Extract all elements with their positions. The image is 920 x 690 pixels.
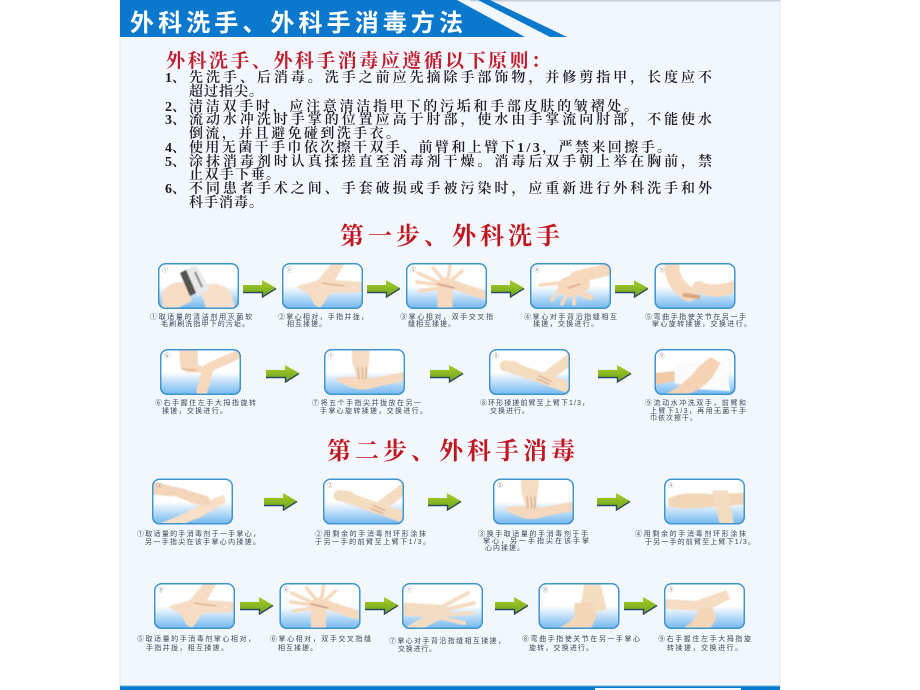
caption <box>480 398 589 415</box>
panel: principles text block: 超过指尖。 <box>189 83 263 100</box>
caption: ⑧环形揉搓前臂至上臂下1/3， <box>480 398 589 407</box>
photo: rubbing forearm: ⑧ <box>493 352 499 360</box>
caption <box>137 634 255 652</box>
caption: ⑤取适量的手消毒剂掌心相对， <box>137 634 255 643</box>
panel: principles text block: 3、 <box>165 113 186 128</box>
step 1-1 <box>150 263 252 328</box>
arrow <box>240 597 273 614</box>
caption: ⑦掌心对手背沿指缝相互揉搓， <box>389 636 505 645</box>
step 1-5 <box>645 263 746 328</box>
caption: 交换进行。 <box>490 406 529 415</box>
arrow <box>598 365 631 382</box>
arrow <box>266 365 299 382</box>
panel: principles text block: 不同患者手术之间、手套破损或手被污染时，应重新进行外科洗手和外 <box>189 180 713 197</box>
caption: ③换手取适量的手消毒剂于手 <box>478 529 588 538</box>
arrow <box>428 493 461 510</box>
caption: 毛刷刷洗指甲下的污垢。 <box>161 319 249 328</box>
caption <box>278 312 368 328</box>
photo: fingers over back of hand: ⑦ <box>406 586 412 594</box>
caption: ⑥右手握住左手大拇指旋转 <box>155 398 256 407</box>
panel: principles text block: 6、 <box>165 182 186 197</box>
caption <box>478 529 589 552</box>
caption: ①取适量的手消毒剂于一手掌心， <box>137 529 260 538</box>
step 1-3 <box>400 263 493 328</box>
panel: principles text block: 科手消毒。 <box>189 194 263 211</box>
arrow <box>615 280 648 297</box>
top edge line <box>470 0 780 2</box>
caption <box>150 312 252 328</box>
arrow <box>624 597 657 614</box>
photo: interlaced fingers: ⑥ <box>284 586 290 594</box>
photo: rotating thumb: ⑥ <box>164 352 170 360</box>
arrow <box>365 597 398 614</box>
arrow <box>495 597 528 614</box>
photo: rotating thumb: ⑨ <box>668 586 674 594</box>
step 2-4 <box>635 478 755 546</box>
arrow <box>430 365 463 382</box>
caption: 掌心，另一手指尖在该手掌 <box>483 536 589 545</box>
panel: poster background <box>120 0 780 690</box>
step 2-3 <box>478 476 589 552</box>
caption <box>312 398 427 415</box>
caption <box>524 312 617 328</box>
step 1-6 <box>155 345 256 415</box>
step 2-9 <box>658 583 751 652</box>
panel: principles text block: 5、 <box>165 155 186 170</box>
heading: step one: 第一步、外科洗手 <box>340 223 560 250</box>
caption <box>137 529 260 546</box>
caption: ③掌心相对，双手交叉指 <box>400 312 493 321</box>
caption <box>658 634 751 652</box>
step 2-5 <box>137 583 255 652</box>
caption: ⑦将五个手指尖并拢放在另一 <box>312 398 421 407</box>
caption: ④用剩余的手消毒剂环形涂抹 <box>635 529 746 538</box>
panel: principles text block: 2、 <box>165 100 186 115</box>
photo: drying with towel: ⑨ <box>658 352 665 360</box>
panel: principles text block: 止双手下垂。 <box>189 166 280 183</box>
caption: ⑤弯曲手指使关节在另一手 <box>645 312 746 321</box>
step 1-7 <box>312 347 427 415</box>
step 1-8 <box>480 349 589 415</box>
panel: principles text block: 流动水冲洗时手掌的位置应高于肘部，使水由手掌流向肘部，不能使水 <box>189 111 712 128</box>
caption: ②用剩余的手消毒剂环形涂抹 <box>315 529 426 538</box>
photo: palm to palm: ② <box>286 266 292 274</box>
step 2-2 <box>315 478 430 546</box>
caption: ②掌心相对，手指并拢， <box>278 312 368 321</box>
caption: 另一手指尖在该手掌心内揉搓。 <box>145 537 260 546</box>
caption: 心内揉搓。 <box>485 543 524 552</box>
caption: 掌心旋转揉搓，交换进行。 <box>652 319 751 328</box>
arrow <box>264 493 297 510</box>
photo: palm over back of hand: ④ <box>534 266 540 274</box>
title: 外科洗手、外科手消毒方法 <box>130 9 463 37</box>
caption: 于另一手的前臂至上臂下1/3。 <box>645 537 755 546</box>
caption: ⑨流动水冲洗双手，前臂和 <box>645 398 746 407</box>
caption: 相互揉搓。 <box>278 643 317 652</box>
photo: rubbing forearm: ② <box>327 482 333 490</box>
principles heading: 外科洗手、外科手消毒应遵循以下原则： <box>166 50 550 72</box>
caption <box>645 398 746 422</box>
caption: 上臂下1/3，再用无菌干手 <box>650 406 746 415</box>
panel: principles text block: 使用无菌干手巾依次擦干双手、前臂和上臂下1/3，严禁来回擦手。 <box>189 139 671 156</box>
caption: ⑨右手握住左手大拇指旋 <box>658 634 751 643</box>
photo: palm to palm: ⑤ <box>158 586 164 594</box>
caption <box>645 312 751 328</box>
step 1-9 <box>645 349 746 422</box>
arrow <box>491 280 524 297</box>
arrow <box>243 280 276 297</box>
caption: 手指并拢，相互揉搓。 <box>146 643 228 652</box>
caption <box>635 529 755 546</box>
caption <box>400 312 493 328</box>
step 1-2 <box>278 263 368 328</box>
panel: principles text block <box>165 50 713 211</box>
step 2-8 <box>522 583 640 652</box>
caption: 交换进行。 <box>398 644 436 653</box>
title banner <box>120 0 567 37</box>
photo: interlaced fingers: ③ <box>410 266 416 274</box>
panel: principles text block: 清洁双手时，应注意清洁指甲下的污垢和手部皮肤的皱褶处。 <box>189 98 638 115</box>
photo: brushing nails: ① <box>162 266 168 274</box>
footer bar <box>120 686 780 690</box>
arrow <box>597 493 630 510</box>
photo: gripping forearm: ④ <box>668 482 674 490</box>
panel: principles text block: 1、 <box>165 71 186 86</box>
step 1-4 <box>524 263 617 328</box>
caption: 相互揉搓。 <box>287 319 326 328</box>
step 2-6 <box>270 583 371 652</box>
caption: 旋转，交换进行。 <box>529 643 593 652</box>
step 2-7 <box>389 583 505 653</box>
caption: 揉搓，交换进行。 <box>533 319 598 328</box>
photo: knuckles in palm: ⑤ <box>658 266 665 274</box>
step 2-1 <box>137 478 260 546</box>
caption: 于另一手的前臂至上臂下1/3。 <box>315 537 430 546</box>
caption: 转揉搓，交换进行。 <box>667 643 742 652</box>
panel: principles text block: 涂抹消毒剂时认真揉搓直至消毒剂干燥。消毒后双手朝上举在胸前，禁 <box>189 153 712 170</box>
caption: 揉搓，交换进行。 <box>162 406 227 415</box>
caption <box>315 529 430 546</box>
caption: ⑧弯曲手指使关节在另一手掌心 <box>522 634 640 643</box>
caption: 缝相互揉搓。 <box>408 319 455 328</box>
arrow <box>367 280 400 297</box>
caption <box>522 634 640 652</box>
heading: step two: 第二步、外科手消毒 <box>327 438 575 465</box>
photo: knuckles in palm: ⑧ <box>542 586 549 594</box>
photo: disinfectant in palm: ① <box>156 482 162 490</box>
caption <box>270 634 371 652</box>
photo: fingertips in palm: ③ <box>497 482 503 490</box>
photo: fingertips in palm: ⑦ <box>328 352 334 360</box>
caption: ①取适量的清洁剂用灭菌软 <box>150 312 252 321</box>
panel: principles text block: 4、 <box>165 141 186 156</box>
caption <box>155 398 256 415</box>
caption: 巾依次擦干。 <box>650 413 697 422</box>
caption <box>389 636 505 653</box>
caption: ⑥掌心相对，双手交叉指缝 <box>270 634 371 643</box>
panel: principles text block: 先洗手、后消毒。洗手之前应先摘除手部饰物，并修剪指甲，长度应不 <box>189 69 713 86</box>
caption: ④掌心对手背沿指缝相互 <box>524 312 617 321</box>
panel: principles text block: 倒流，并且避免碰到洗手衣。 <box>189 125 400 142</box>
caption: 手掌心旋转揉搓，交换进行。 <box>320 406 427 415</box>
